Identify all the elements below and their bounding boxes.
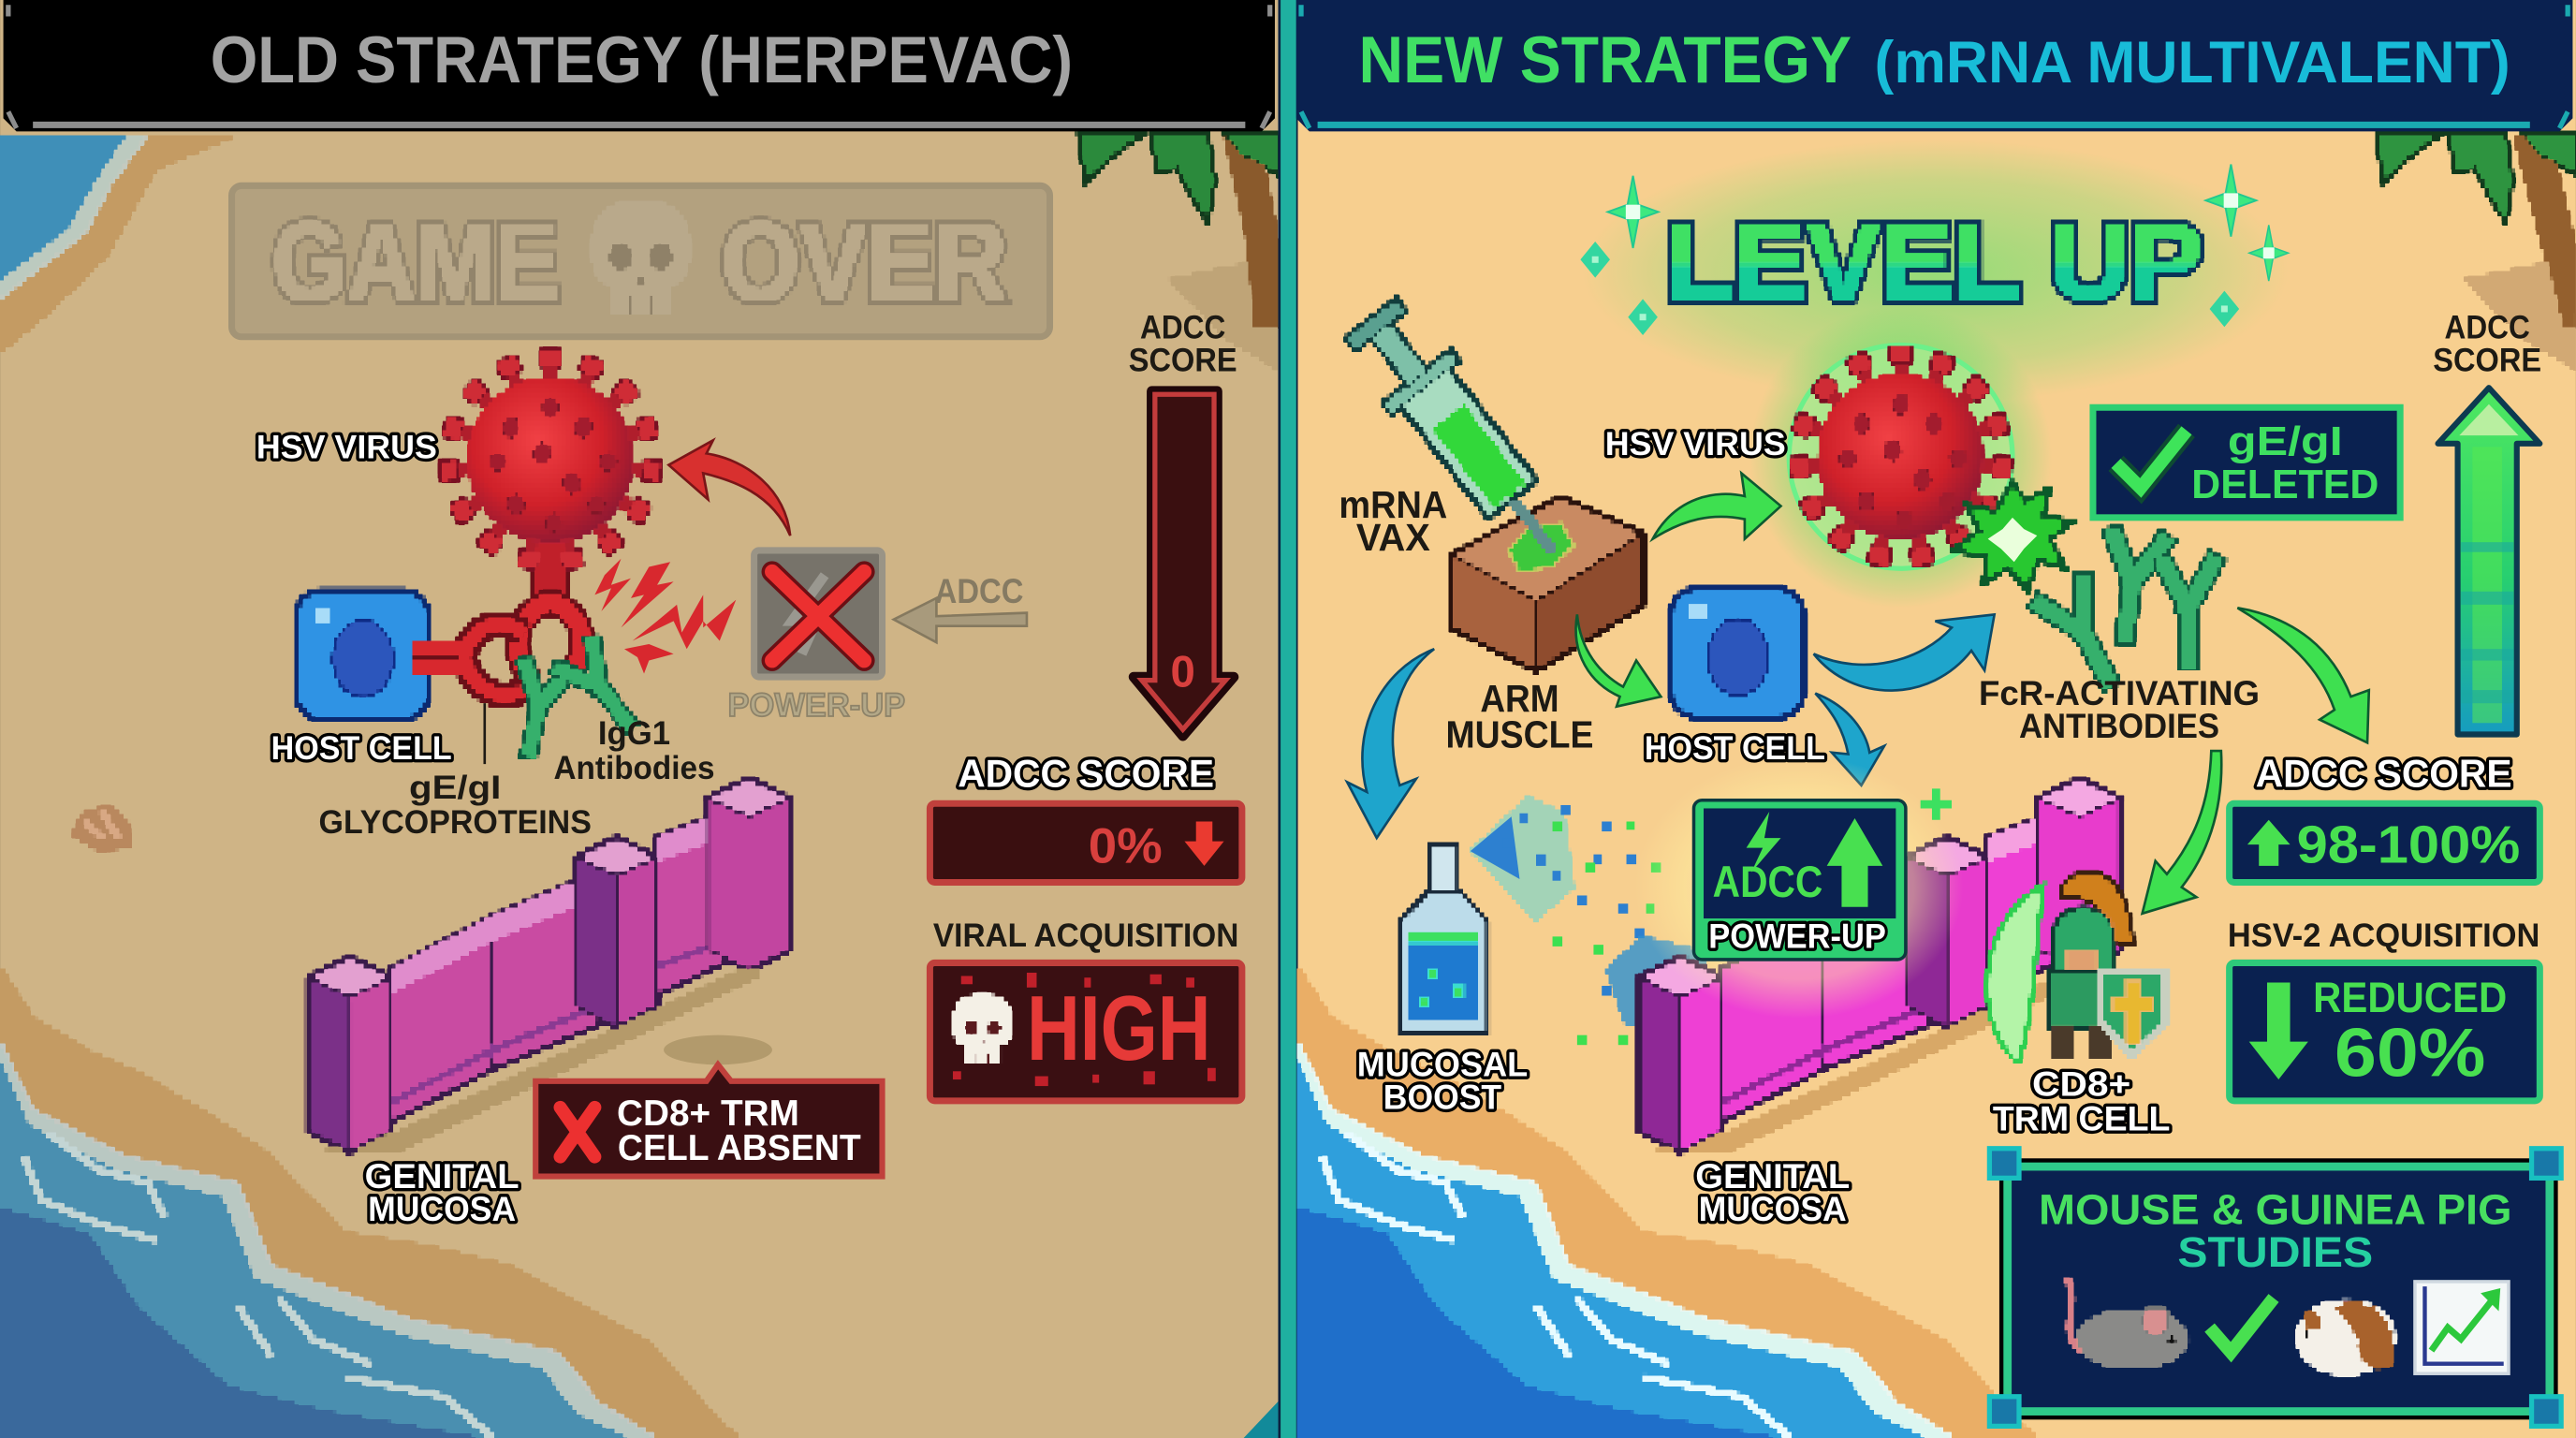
- label: FcR antibodies: FcR-ACTIVATING: [1979, 674, 2260, 712]
- label: HSV virus: HSV VIRUS: [256, 430, 437, 466]
- icon: CD8+ knight: [1988, 873, 2165, 1062]
- label: ADCC score over bar: SCORE: [1129, 343, 1237, 379]
- icon: gE/gI glycoprotein: [414, 624, 522, 695]
- stat: ADCC 98-100%: 98-100%: [2297, 814, 2520, 873]
- label: power-up: POWER-UP: [728, 687, 905, 724]
- icon: results chart: [2415, 1282, 2509, 1373]
- icon: mucosal spray particles: [1471, 797, 1708, 1045]
- arrow: host cell to antibodies: [1814, 614, 1995, 691]
- divider between panels: [1244, 0, 1334, 1438]
- arrow: muscle to virus: [1653, 473, 1781, 539]
- beach: bottom-left sea right panel: [1298, 966, 2037, 1438]
- arrow: red curved arrow to virus: [668, 440, 790, 536]
- label: ADCC score bar new: ADCC: [2445, 310, 2530, 346]
- icon: host cell new: [1669, 587, 1806, 720]
- panel: mouse and guinea pig studies: [1989, 1149, 2561, 1426]
- panel: mouse and guinea pig studies: STUDIES: [2177, 1228, 2373, 1276]
- header: old strategy: OLD STRATEGY (HERPEVAC): [211, 22, 1073, 96]
- label: mucosal boost: [1357, 1046, 1528, 1117]
- icon: arm muscle block: [1453, 498, 1643, 670]
- palm tree: [1079, 135, 1280, 370]
- arrow: muscle to bottle: [1347, 649, 1434, 838]
- stat: reduced 60%: 60%: [2334, 1014, 2485, 1092]
- game over text: OVER: OVER: [722, 200, 1007, 325]
- icon: green burst: [1955, 485, 2070, 588]
- arrow: host cell to power-up: [1815, 694, 1884, 785]
- icon: check mark: [2210, 1298, 2274, 1352]
- stat: reduced 60%: [2230, 962, 2539, 1101]
- stat: viral acquisition high: [929, 962, 1242, 1101]
- panel: new strategy background: [1298, 0, 2576, 1438]
- icon: red lightning bolts: [594, 559, 736, 674]
- game over text: GAME: GAME: [272, 200, 560, 325]
- callout: CD8+ TRM cell absent: CD8+ TRM: [617, 1093, 799, 1134]
- beach: bottom-left sea: [0, 966, 739, 1438]
- power-up glow: [1634, 756, 1963, 1019]
- label: mRNA vax: mRNA: [1339, 483, 1447, 526]
- label: IgG1 antibodies: [554, 715, 714, 786]
- seashell: [72, 805, 131, 851]
- label: host cell new: HOST CELL: [1645, 730, 1825, 767]
- label: CD8+ TRM cell: [1993, 1065, 2170, 1137]
- label: ADCC score bar new: SCORE: [2433, 343, 2541, 379]
- box: ADCC power-up: POWER-UP: [1708, 917, 1886, 956]
- beach: top-left sea: [0, 135, 239, 353]
- label: CD8+ TRM cell: TRM CELL: [1993, 1099, 2170, 1137]
- palm tree right: [2378, 135, 2576, 370]
- stat: ADCC score heading: ADCC SCORE: [958, 752, 1214, 796]
- header: new strategy: NEW STRATEGY: [1358, 22, 1852, 96]
- label: IgG1 antibodies: IgG1: [598, 715, 670, 752]
- panel: mouse and guinea pig studies: MOUSE & GUINEA PIG: [2039, 1185, 2511, 1233]
- label: ADCC grey: ADCC: [935, 572, 1023, 610]
- arrow: antibodies to score: [2237, 608, 2369, 742]
- callout: CD8+ TRM cell absent: [535, 1064, 883, 1177]
- label: mRNA vax: [1339, 483, 1447, 559]
- icon: HSV virus: [440, 350, 661, 616]
- icon: IgG1 antibodies: [509, 644, 644, 755]
- icon: disabled power-up: [754, 550, 883, 677]
- plus sparkle: [1921, 788, 1952, 820]
- label: FcR antibodies: [1979, 674, 2260, 745]
- stat: ADCC 0%: 0%: [1089, 818, 1163, 873]
- label: genital mucosa: MUCOSA: [368, 1190, 516, 1228]
- box: gE/gI deleted: [2093, 407, 2400, 518]
- icon: mucosal spray bottle: [1399, 846, 1486, 1032]
- icon: guinea pig: [2297, 1299, 2395, 1375]
- faded cell shadow: [664, 1035, 772, 1064]
- box: ADCC power-up: ADCC: [1713, 858, 1822, 907]
- icon: red receptor claw: [518, 601, 582, 677]
- score bar: falling arrow: [1134, 391, 1234, 736]
- label: ADCC score over bar: ADCC: [1140, 310, 1225, 346]
- icon: mouse: [2067, 1278, 2188, 1369]
- wall: genital mucosa new: [1640, 779, 2119, 1153]
- pointer line for glycoproteins: [484, 703, 486, 764]
- label: arm muscle: ARM: [1480, 677, 1559, 720]
- icon: mRNA syringe: [1338, 292, 1587, 577]
- icon: host cell: [294, 588, 431, 721]
- icon: white skull: [953, 994, 1012, 1064]
- label: gE/gI glycoproteins: gE/gI: [409, 770, 501, 806]
- label: FcR antibodies: ANTIBODIES: [2019, 707, 2219, 745]
- box: gE/gI deleted: DELETED: [2191, 462, 2378, 507]
- label: IgG1 antibodies: Antibodies: [554, 750, 714, 786]
- callout: CD8+ TRM cell absent: CELL ABSENT: [618, 1128, 861, 1168]
- label: genital mucosa: GENITAL: [365, 1157, 520, 1196]
- stat: ADCC score heading new: ADCC SCORE: [2256, 752, 2511, 796]
- label: HSV virus new: HSV VIRUS: [1605, 426, 1786, 462]
- icon: grey skull: [592, 200, 690, 315]
- label: genital mucosa: [365, 1157, 520, 1228]
- label: genital mucosa new: [1695, 1157, 1850, 1228]
- label: gE/gI glycoproteins: [319, 770, 592, 841]
- level up heading: LEVEL UP: [1666, 200, 2203, 322]
- label: genital mucosa new: MUCOSA: [1699, 1190, 1847, 1228]
- label: arm muscle: MUSCLE: [1445, 713, 1593, 756]
- label: ADCC score bar new: [2433, 310, 2541, 379]
- header: new strategy: [1296, 0, 2572, 131]
- label: ADCC score over bar: [1129, 310, 1237, 379]
- arrow: antibodies to CD8 cell: [2143, 751, 2221, 914]
- wall: genital mucosa old: [309, 779, 788, 1153]
- arrow: muscle to host cell: [1576, 614, 1661, 707]
- icon: FcR-activating antibodies: [2041, 536, 2213, 691]
- header: old strategy: [4, 0, 1275, 131]
- score bar: rising arrow: [2438, 388, 2539, 734]
- label: genital mucosa new: GENITAL: [1695, 1157, 1850, 1196]
- game over banner: [232, 185, 1050, 337]
- header: new strategy: (mRNA MULTIVALENT): [1875, 30, 2510, 95]
- label: mucosal boost: BOOST: [1383, 1078, 1502, 1117]
- label: host cell: HOST CELL: [271, 730, 452, 767]
- score bar: falling arrow: 0: [1170, 648, 1195, 697]
- label: gE/gI glycoproteins: GLYCOPROTEINS: [319, 804, 592, 841]
- level up glow: [1582, 139, 2289, 403]
- icon: virus with glow: [1749, 305, 2052, 608]
- burst core: [1988, 518, 2037, 562]
- sparkles: [1580, 165, 2289, 335]
- arrow: grey ADCC arrow: [894, 598, 1027, 642]
- label: CD8+ TRM cell: CD8+: [2032, 1065, 2130, 1104]
- label: mRNA vax: VAX: [1356, 516, 1430, 559]
- stat: ADCC 0%: [929, 803, 1242, 882]
- label: arm muscle: [1445, 677, 1593, 756]
- label: mucosal boost: MUCOSAL: [1357, 1046, 1528, 1084]
- stat: reduced 60%: REDUCED: [2313, 974, 2507, 1021]
- stat: ADCC 98-100%: [2230, 803, 2539, 882]
- stat: viral acquisition high: HIGH: [1027, 976, 1211, 1079]
- box: gE/gI deleted: gE/gI: [2228, 418, 2343, 464]
- box: ADCC power-up: [1693, 800, 1906, 960]
- stat: HSV-2 acquisition label: HSV-2 ACQUISITION: [2228, 917, 2539, 954]
- panel: old strategy background: [0, 0, 1280, 1438]
- stat: viral acquisition label: VIRAL ACQUISITION: [933, 917, 1238, 954]
